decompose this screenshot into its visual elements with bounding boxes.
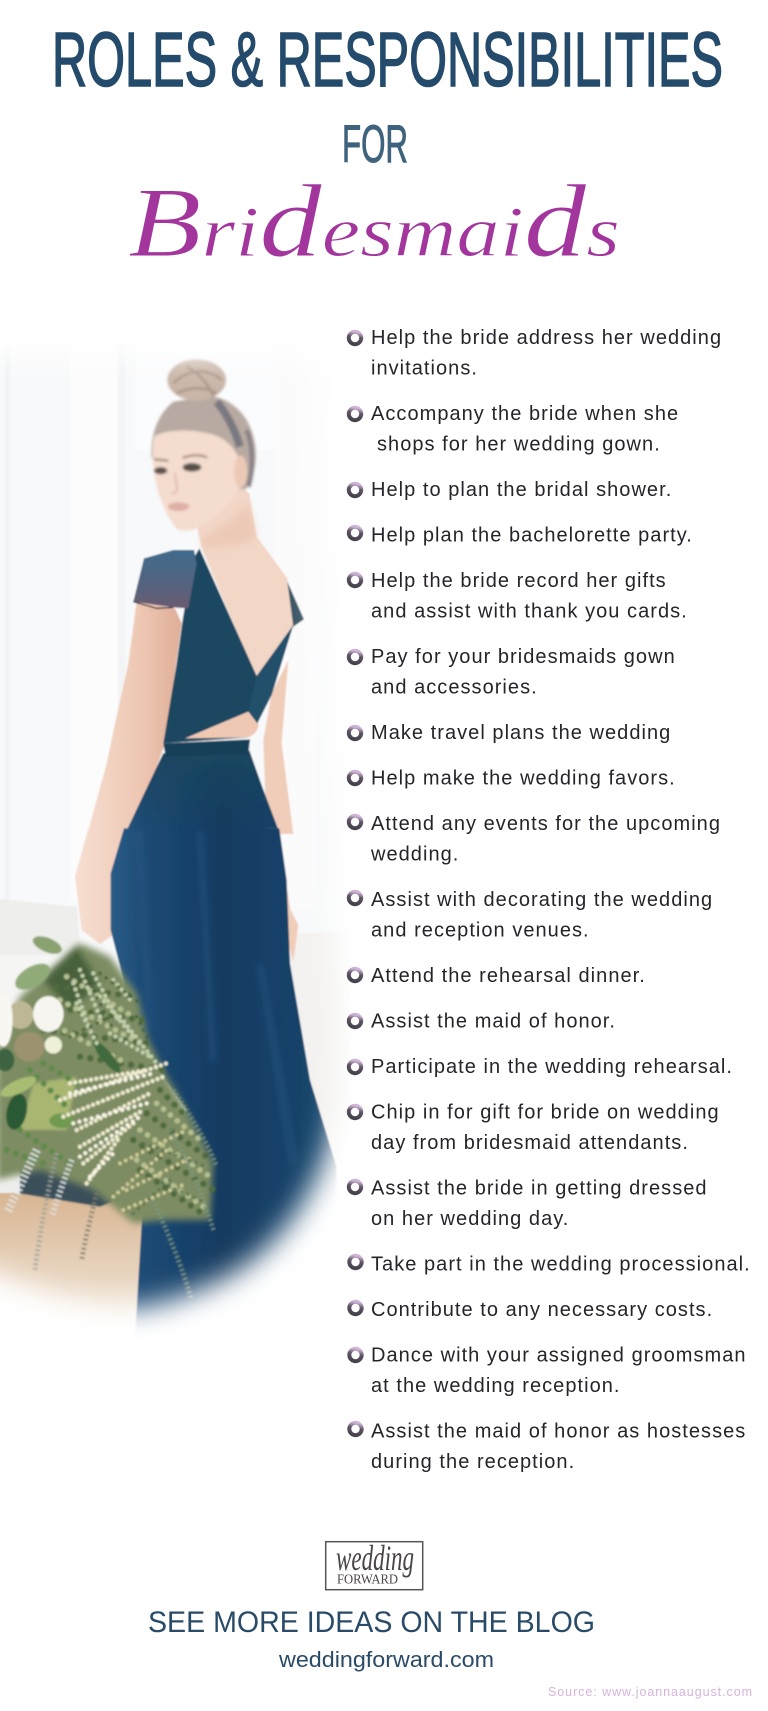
- item 18: at the wedding reception.: [371, 1375, 620, 1397]
- texture dots: [7, 977, 213, 1217]
- item 1: [349, 327, 722, 379]
- item 15: on her wedding day.: [371, 1208, 569, 1230]
- item 10: Assist with decorating the wedding: [371, 889, 713, 911]
- bodice right panel: [248, 625, 293, 723]
- item 10: and reception venues.: [371, 919, 590, 941]
- item 14: Chip in for gift for bride on wedding: [371, 1102, 720, 1124]
- item 5: [349, 570, 688, 622]
- item 7: Make travel plans the wedding: [371, 722, 671, 744]
- left hand: [75, 828, 128, 944]
- skirt: [111, 828, 337, 1363]
- right arm: [263, 660, 293, 834]
- responsibilities list: [349, 327, 751, 1473]
- item 15: [349, 1178, 708, 1230]
- photo: bridesmaid in navy dress holding bouquet: [0, 330, 350, 1370]
- item 19: Assist the maid of honor as hostesses: [371, 1420, 746, 1442]
- item 11: Attend the rehearsal dinner.: [371, 965, 646, 987]
- item 1: Help the bride address her wedding: [371, 327, 722, 349]
- item 2: Accompany the bride when she: [371, 403, 679, 425]
- item 10: [349, 889, 713, 941]
- item 5: Help the bride record her gifts: [371, 570, 667, 592]
- lips: [168, 502, 189, 511]
- item 4: Help plan the bachelorette party.: [371, 524, 693, 546]
- footer website: weddingforward.com: [278, 1647, 494, 1672]
- skirt folds: [198, 834, 294, 1159]
- neck and bare back: [197, 487, 295, 678]
- item 13: Participate in the wedding rehearsal.: [371, 1056, 733, 1078]
- head: [151, 359, 256, 531]
- item 18: Dance with your assigned groomsman: [371, 1344, 747, 1366]
- waistband: [163, 739, 250, 757]
- item 16: Take part in the wedding processional.: [371, 1254, 751, 1276]
- left arm: [87, 602, 182, 834]
- item 9: [349, 813, 721, 865]
- item 12: Assist the maid of honor.: [371, 1010, 616, 1032]
- item 1: invitations.: [371, 357, 478, 379]
- item 9: Attend any events for the upcoming: [371, 813, 721, 835]
- item 6: Pay for your bridesmaids gown: [371, 646, 676, 668]
- item 19: during the reception.: [371, 1451, 575, 1473]
- logo: wedding forward: [326, 1538, 423, 1590]
- face: [153, 430, 243, 531]
- hair back: [151, 396, 256, 490]
- item 9: wedding.: [370, 843, 459, 865]
- bouquet green mass: [0, 943, 213, 1223]
- nose shadow: [172, 473, 177, 494]
- title: bridesmaids script: Bridesmai ds: [128, 164, 620, 279]
- hair bun: [167, 359, 226, 401]
- item 2: shops for her wedding gown.: [377, 433, 661, 455]
- item 2: [349, 403, 679, 455]
- seed clusters: [14, 1032, 45, 1061]
- ear: [234, 456, 247, 488]
- large leaves: [32, 935, 63, 955]
- item 17: Contribute to any necessary costs.: [371, 1299, 713, 1321]
- cream blossom clusters: [60, 1063, 167, 1183]
- source credit: Source: www.joannaaugust.com: [548, 1685, 752, 1699]
- brows: [154, 455, 207, 461]
- item 18: [349, 1344, 747, 1397]
- item 15: Assist the bride in getting dressed: [371, 1178, 708, 1200]
- item 8: Help make the wedding favors.: [371, 768, 676, 790]
- waist skin cutout: [185, 712, 258, 738]
- item 5: and assist with thank you cards.: [371, 600, 688, 622]
- eyes: [154, 467, 167, 474]
- back strap: [287, 582, 304, 627]
- logo: wedding forward: FORWARD: [337, 1572, 398, 1586]
- foliage sprigs: [60, 957, 207, 1213]
- right hand: [267, 828, 298, 962]
- bodice: [163, 548, 294, 743]
- figure: [87, 359, 304, 834]
- lower dress and hands: [0, 828, 337, 1363]
- bouquet: [0, 933, 217, 1300]
- item 6: and accessories.: [371, 676, 538, 698]
- logo: wedding forward: wedding: [336, 1538, 414, 1578]
- item 3: Help to plan the bridal shower.: [371, 479, 672, 501]
- eucalyptus fronds: [7, 1090, 217, 1300]
- item 19: [349, 1420, 746, 1473]
- bouquet dark underside: [18, 1165, 114, 1208]
- item 14: [349, 1102, 720, 1154]
- item 14: day from bridesmaid attendants.: [371, 1132, 689, 1154]
- skirt top shade: [139, 753, 232, 807]
- sleeve: [133, 550, 197, 608]
- photo background: bright window room: [0, 360, 337, 1319]
- footer call to action: SEE MORE IDEAS ON THE BLOG: [148, 1606, 595, 1639]
- skirt top: [125, 751, 280, 834]
- white roses: [33, 996, 64, 1032]
- item 6: [349, 646, 676, 698]
- title: for: FOR: [342, 115, 408, 174]
- hair band: [217, 402, 240, 447]
